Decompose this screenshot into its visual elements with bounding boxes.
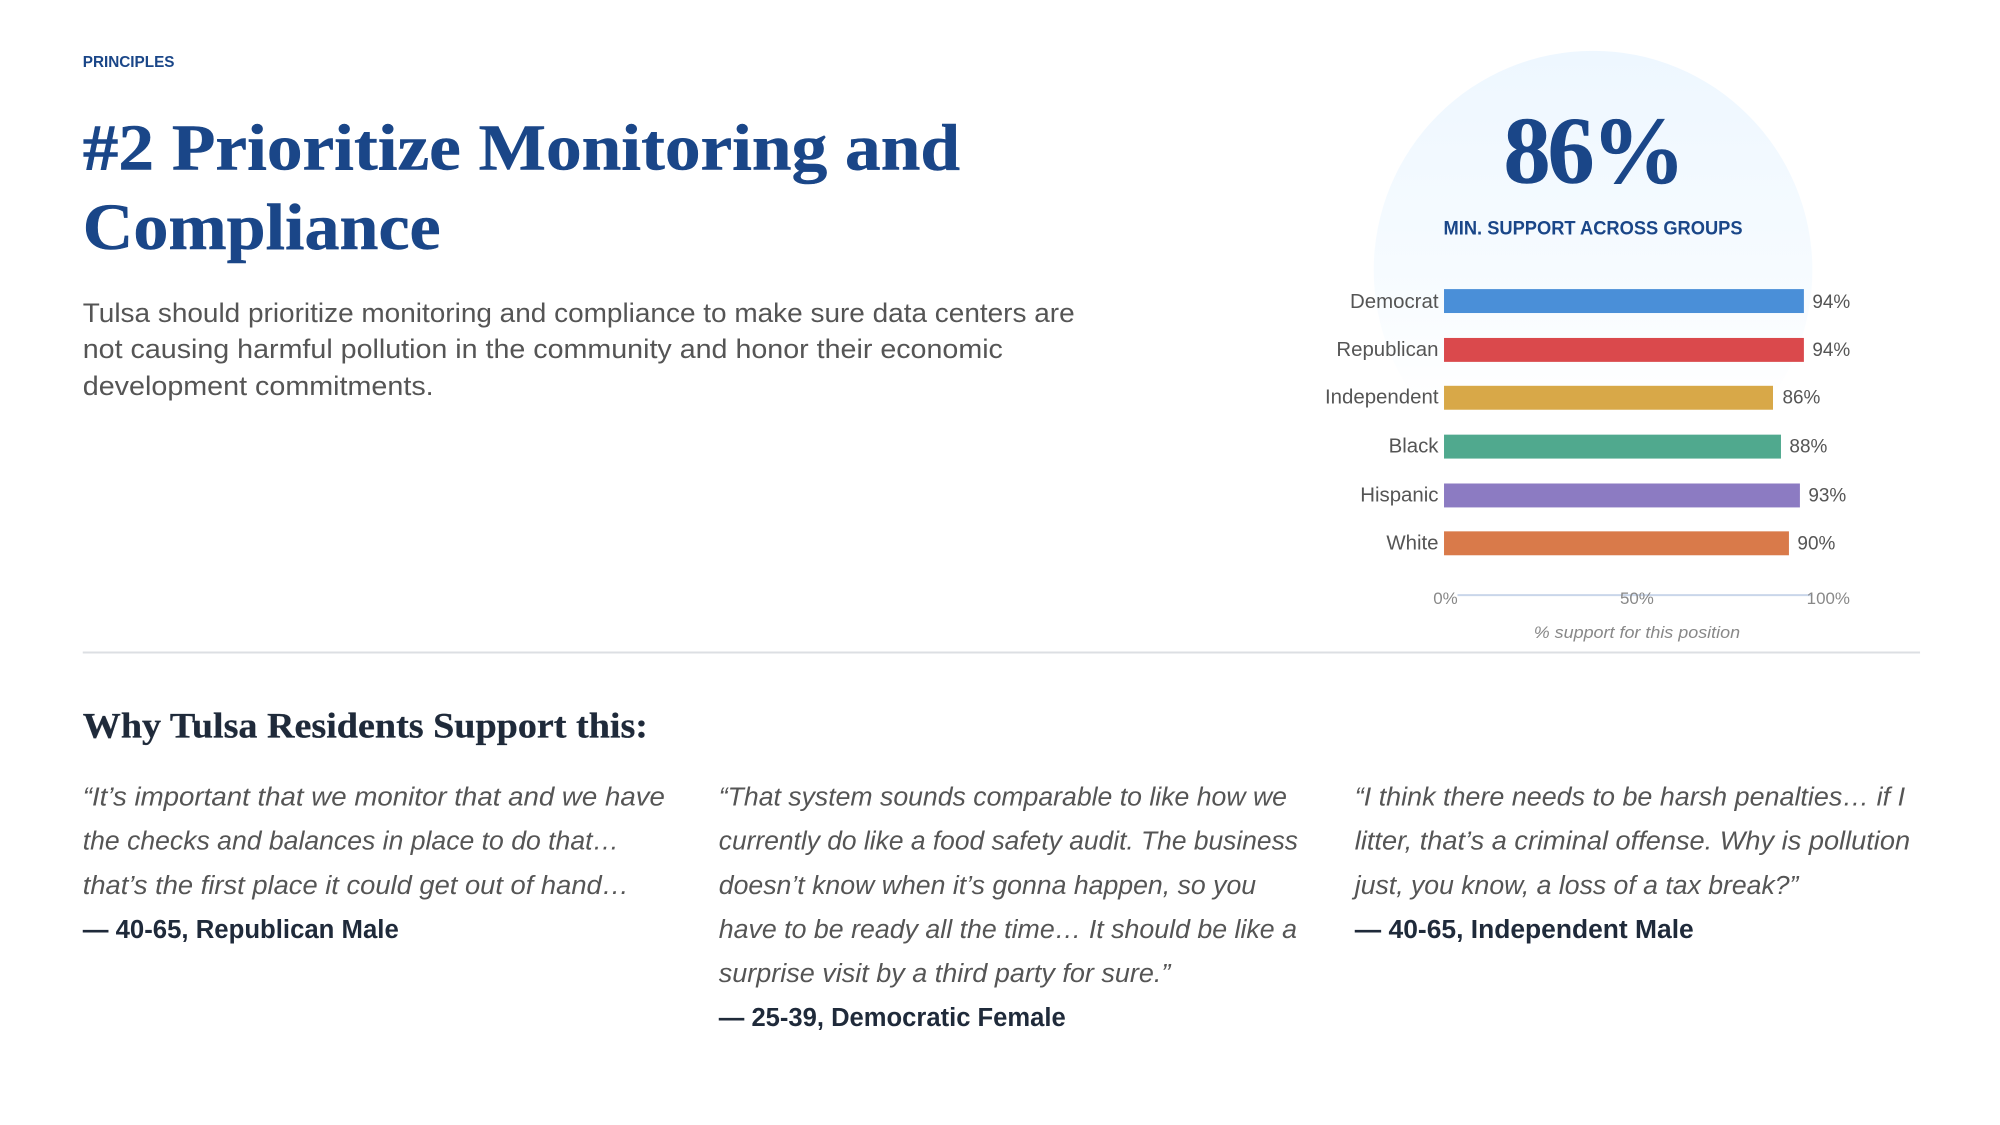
quote 1: “It’s important that we monitor that and we have [83, 783, 665, 811]
big stat: 86% [1504, 99, 1682, 204]
title [83, 111, 960, 264]
stat caption: MIN. SUPPORT ACROSS GROUPS [1444, 217, 1743, 239]
quote 2: — 25-39, Democratic Female [719, 1004, 1066, 1032]
intro text [83, 298, 1075, 401]
background circle [1374, 51, 1812, 489]
panel: support chart [1325, 51, 1850, 642]
axis: 100% [1807, 589, 1850, 608]
intro text: development commitments. [83, 371, 434, 401]
quote 2: surprise visit by a third party for sure.” [719, 960, 1172, 988]
quote 3 [1352, 783, 1910, 944]
quote 2: doesn’t know when it’s gonna happen, so you [719, 872, 1256, 900]
quote 2: currently do like a food safety audit. The business [719, 827, 1298, 855]
quote 2: “That system sounds comparable to like how we [719, 783, 1287, 811]
axis title: % support for this position [1534, 623, 1740, 642]
bar: Hispanic: 93% [1808, 485, 1846, 506]
axis: 0% [1433, 589, 1458, 608]
bar: Republican: Republican [1336, 339, 1439, 361]
section label: PRINCIPLES [83, 54, 174, 71]
section heading: Why Tulsa Residents Support this: [83, 706, 648, 746]
axis: 50% [1620, 589, 1654, 608]
bar: White: 90% [1797, 533, 1835, 554]
quote 1: — 40-65, Republican Male [83, 916, 399, 944]
bar: White [1386, 531, 1835, 555]
quote 1: the checks and balances in place to do that… [83, 827, 619, 855]
bar: White: White [1386, 532, 1439, 554]
axis [1433, 589, 1850, 608]
bar: Hispanic: Hispanic [1360, 484, 1439, 506]
bar: Black: 88% [1789, 437, 1828, 458]
bar: Black: Black [1389, 436, 1439, 458]
quote 3: “I think there needs to be harsh penalties… if I [1355, 783, 1905, 811]
intro text: not causing harmful pollution in the community and honor their economic [83, 334, 1003, 364]
bar: Democrat [1350, 289, 1850, 313]
quote 3: — 40-65, Independent Male [1355, 916, 1694, 944]
bar: Independent [1325, 386, 1821, 410]
bar: Democrat: Democrat [1350, 291, 1439, 313]
title: Compliance [83, 191, 441, 264]
bar: Black [1389, 435, 1828, 459]
bar: Independent: Independent [1325, 387, 1439, 409]
quote 1 [83, 783, 665, 944]
quote 2 [719, 783, 1298, 1032]
intro text: Tulsa should prioritize monitoring and compliance to make sure data centers are [83, 298, 1075, 328]
bar: Independent: 86% [1782, 388, 1821, 409]
bar: Republican [1336, 338, 1850, 362]
bar: Democrat: 94% [1812, 292, 1850, 313]
quote 3: just, you know, a loss of a tax break?” [1352, 872, 1800, 900]
bar: Republican: 94% [1812, 340, 1850, 361]
quote 2: have to be ready all the time… It should be like a [719, 916, 1297, 944]
title: #2 Prioritize Monitoring and [83, 111, 960, 184]
quote 3: litter, that’s a criminal offense. Why is pollution [1355, 827, 1910, 855]
bar: Hispanic [1360, 483, 1846, 507]
quote 1: that’s the first place it could get out of hand… [83, 872, 629, 900]
